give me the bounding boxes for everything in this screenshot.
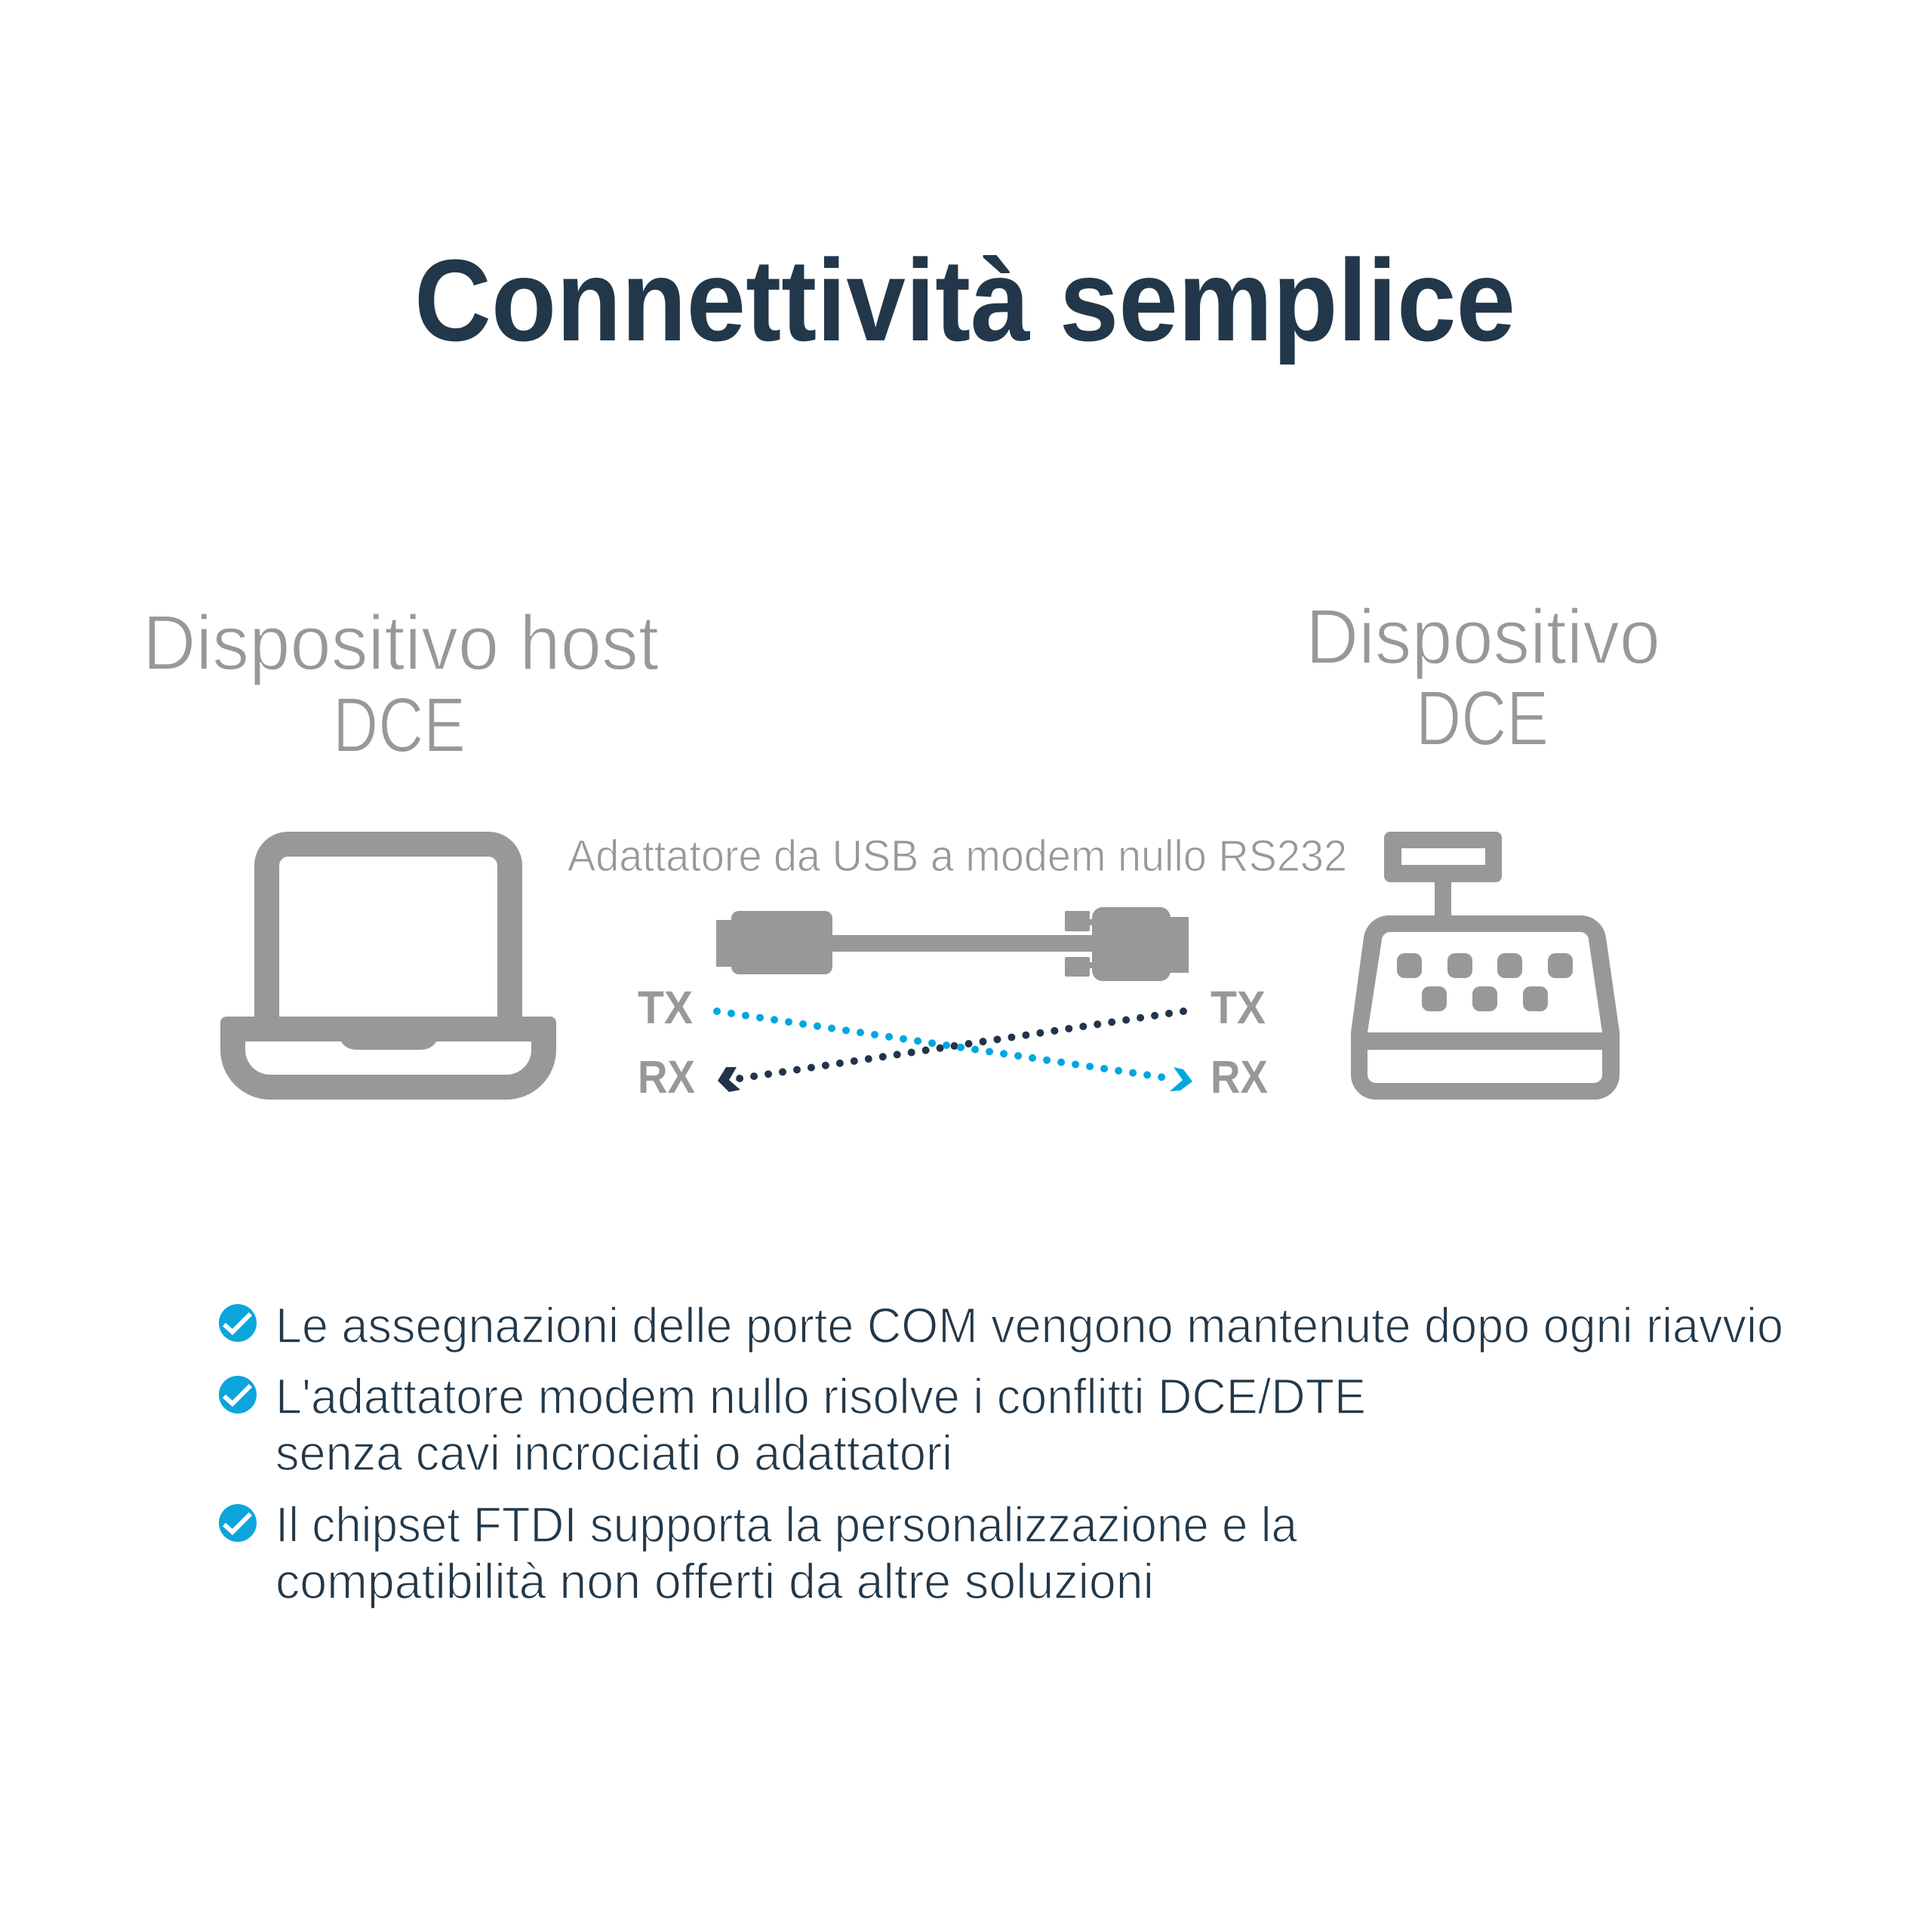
heading: host device: Dispositivo host xyxy=(143,599,659,686)
arrow: blue dotted TX to RX xyxy=(717,1011,1192,1091)
bullet 3 xyxy=(219,1497,1297,1609)
bullet 3: Il chipset FTDI supporta la personalizzazione e la xyxy=(275,1497,1297,1552)
heading: DCE device: DCE xyxy=(1416,675,1549,761)
bullet 3: compatibilità non offerti da altre soluzioni xyxy=(275,1553,1154,1609)
label: RX right: RX xyxy=(1211,1051,1268,1103)
label: RX left: RX xyxy=(638,1051,695,1103)
heading: DCE device xyxy=(1306,593,1660,761)
cable label: Adattatore da USB a modem nullo RS232 xyxy=(568,832,1347,881)
heading: host device: DCE xyxy=(333,681,466,768)
bullet 1: Le assegnazioni delle porte COM vengono mantenute dopo ogni riavvio xyxy=(275,1297,1783,1353)
bullet 2: L'adattatore modem nullo risolve i conflitti DCE/DTE xyxy=(275,1368,1366,1424)
title: Connettività semplice xyxy=(414,235,1515,365)
label: TX left: TX xyxy=(638,982,693,1033)
arrow: dark dotted TX to RX xyxy=(718,1011,1183,1092)
bullet list xyxy=(219,1297,1783,1609)
heading: DCE device: Dispositivo xyxy=(1306,593,1660,680)
bullet 2: senza cavi incrociati o adattatori xyxy=(275,1425,952,1481)
icon: adapter cable xyxy=(716,907,1189,981)
bullet 2 xyxy=(219,1368,1366,1481)
icon: cash register xyxy=(1351,832,1620,1100)
label: TX right: TX xyxy=(1211,982,1266,1033)
heading: host device xyxy=(143,599,659,768)
icon: laptop xyxy=(220,832,556,1100)
